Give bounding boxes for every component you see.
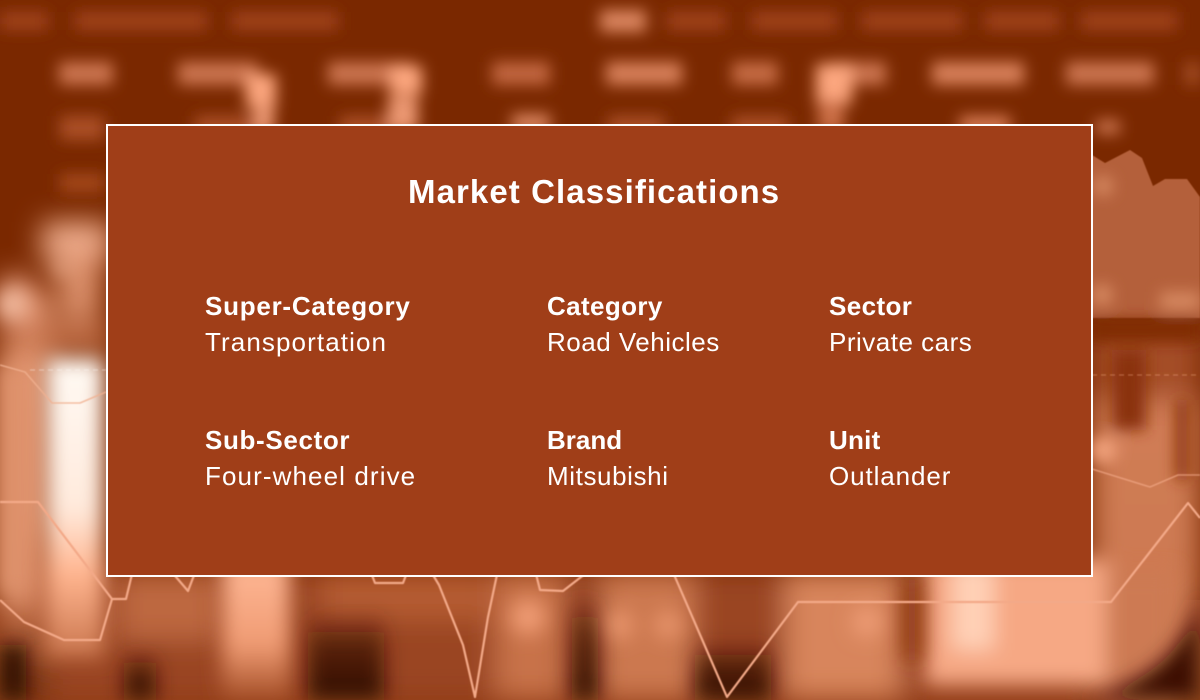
dark gaps at the bottom	[0, 580, 1200, 700]
item: category: Category	[547, 291, 663, 321]
item: unit: Unit	[829, 425, 881, 455]
item: category	[547, 291, 720, 357]
item: sub-sector	[205, 425, 416, 491]
blurred table text rows	[0, 10, 1200, 192]
item: unit: Outlander	[829, 461, 951, 491]
item: super-category: Super-Category	[205, 291, 411, 321]
item: sector	[829, 291, 972, 357]
background: area chart top right	[1088, 150, 1200, 480]
item: brand: Brand	[547, 425, 622, 455]
item: sector: Private cars	[829, 327, 972, 357]
item: sub-sector: Sub-Sector	[205, 425, 350, 455]
item: super-category: Transportation	[205, 327, 387, 357]
item: sub-sector: Four-wheel drive	[205, 461, 416, 491]
panel: market classifications	[106, 124, 1093, 577]
item: unit	[829, 425, 951, 491]
item: sector: Sector	[829, 291, 912, 321]
title: Market Classifications	[408, 173, 780, 210]
item: category: Road Vehicles	[547, 327, 720, 357]
item: brand: Mitsubishi	[547, 461, 669, 491]
background: chart lines	[0, 365, 1200, 697]
item: super-category	[205, 291, 411, 357]
lower base and columns	[0, 222, 1200, 700]
item: brand	[547, 425, 669, 491]
white column	[0, 260, 104, 658]
